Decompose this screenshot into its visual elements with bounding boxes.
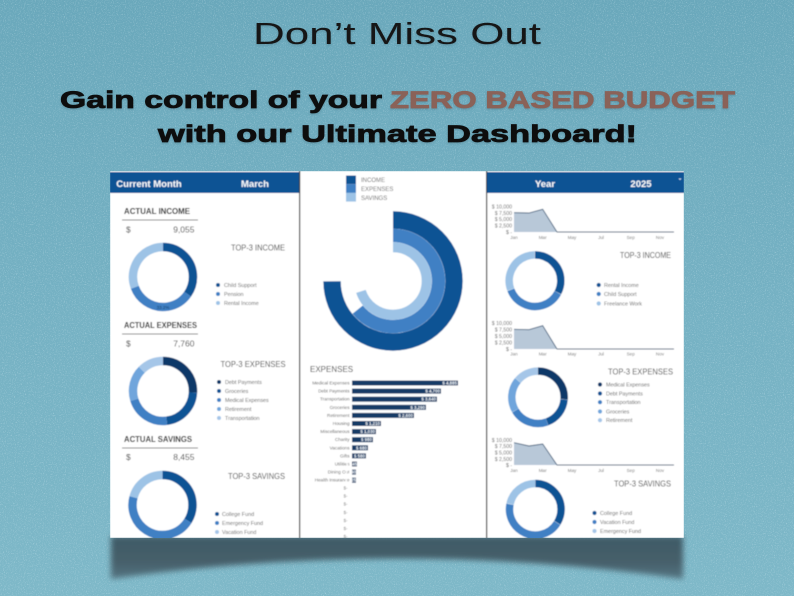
legend: year top-3 expenses: Retirement (606, 418, 633, 424)
bar chart: expenses: $- (343, 502, 348, 507)
legend: income expenses savings: INCOME (361, 178, 385, 184)
area chart: savings: Mar (539, 468, 547, 473)
headline (60, 87, 735, 148)
area chart: savings: $ 10,000 (492, 438, 512, 444)
legend: year top-3 savings: College Fund (600, 511, 632, 517)
legend: top-3 savings (215, 512, 263, 536)
area chart: savings: Sep (627, 468, 635, 473)
actual income: $ (126, 224, 131, 234)
legend: year top-3 savings: Emergency Fund (600, 529, 641, 535)
legend: top-3 expenses: Debt Payments (225, 380, 262, 386)
actual income: ACTUAL INCOME (124, 206, 190, 216)
legend: year top-3 savings (592, 511, 641, 535)
panel: center (310, 176, 458, 539)
legend: year top-3 income: Child Support (604, 292, 637, 298)
donut: income (128, 242, 198, 312)
donut: year income (504, 250, 566, 311)
bar chart: expenses: Retirement (327, 413, 350, 418)
legend: top-3 expenses: Transportation (225, 416, 260, 422)
area chart: expenses: $ 10,000 (492, 321, 512, 327)
bar chart: expenses: $ 3,290 (410, 405, 426, 410)
bar chart: expenses: $ 4,885 (442, 380, 458, 386)
legend: year top-3 expenses: Debt Payments (606, 392, 643, 398)
legend: top-3 income (216, 283, 259, 307)
header: current month: Current Month (116, 179, 182, 190)
panel: current month (110, 172, 299, 546)
actual income: 9,055 (173, 224, 195, 234)
bar chart: expenses: Debt Payments (318, 389, 350, 394)
actual expenses: 7,760 (173, 338, 195, 348)
bar chart: expenses: Miscellaneous (320, 429, 350, 434)
actual expenses: $ (126, 338, 131, 348)
bar chart: expenses (312, 380, 458, 539)
actual savings: 8,455 (173, 452, 195, 462)
bar chart: expenses: Dining Out (328, 470, 350, 475)
radial bar chart (332, 220, 454, 342)
dashboard shadow (111, 536, 683, 579)
area chart: income: $ 2,500 (495, 224, 512, 230)
area chart: income: $ - (506, 230, 512, 236)
area chart: savings (492, 438, 674, 473)
bar chart: expenses: Health Insurance (315, 478, 350, 483)
donut: year savings (505, 479, 566, 538)
headline: ZERO BASED BUDGET (390, 87, 735, 114)
legend: year top-3 expenses: Transportation (606, 400, 641, 406)
bar chart: expenses: $- (343, 518, 348, 523)
legend: year top-3 income: Freelance Work (604, 302, 642, 308)
area chart: savings: Jan (510, 468, 518, 473)
area chart: expenses: Jul (598, 352, 604, 356)
area chart: savings: $ 5,000 (495, 450, 512, 456)
area chart: income: $ 7,500 (495, 211, 512, 217)
legend: top-3 expenses: Medical Expenses (225, 398, 269, 404)
legend: top-3 income: Rental Income (224, 301, 259, 307)
bar chart: expenses: $ 2,600 (398, 413, 414, 418)
legend: top-3 income: Child Support (224, 283, 257, 289)
legend: top-3 expenses: Retirement (225, 407, 252, 413)
bar chart: expenses: $ 125 (345, 478, 357, 483)
area chart: expenses: $ - (506, 347, 512, 353)
area chart: expenses: Sep (627, 352, 635, 356)
legend: year top-3 income (597, 283, 642, 308)
bar chart: expenses: $ 145 (346, 462, 358, 466)
area chart: expenses: Mar (539, 352, 547, 356)
donut: expenses (128, 356, 198, 426)
area chart: expenses: $ 2,500 (495, 340, 512, 346)
donut: year expenses (508, 366, 569, 428)
heading: year top-3 expenses: TOP-3 EXPENSES (608, 367, 673, 377)
legend: top-3 savings: Emergency Fund (222, 521, 263, 527)
area chart: expenses: Nov (656, 352, 665, 356)
headline: Gain control of your (60, 87, 383, 114)
donut: savings (128, 470, 198, 538)
legend: year top-3 expenses (598, 382, 650, 424)
heading: top-3 income: TOP-3 INCOME (231, 242, 285, 252)
bar chart: expenses: $ 980 (361, 437, 373, 442)
bar chart: expenses: Charity (335, 437, 350, 442)
bar chart: expenses: Utilities (335, 462, 350, 466)
actual expenses: ACTUAL EXPENSES (124, 320, 197, 330)
heading: year top-3 savings: TOP-3 SAVINGS (614, 479, 671, 489)
area chart: income: Nov (656, 235, 665, 240)
title: Don’t Miss Out (253, 16, 542, 51)
area chart: savings: $ 7,500 (495, 444, 512, 450)
actual savings: ACTUAL SAVINGS (124, 434, 192, 444)
dashboard (110, 171, 684, 546)
area chart: income: Mar (539, 235, 547, 240)
area chart: savings: Nov (656, 468, 665, 473)
area chart: expenses: May (568, 352, 577, 356)
area chart: income: Jan (510, 235, 518, 240)
area chart: expenses: Jan (510, 352, 518, 356)
bar chart: expenses: $ 140 (345, 470, 357, 475)
actual income (122, 206, 198, 234)
bar chart: expenses: $- (343, 526, 348, 531)
bar chart: expenses: Medical Expenses (312, 380, 350, 386)
area chart: income: Sep (627, 235, 635, 240)
area chart: income: $ 5,000 (495, 217, 512, 223)
area chart: expenses: $ 5,000 (495, 334, 512, 340)
area chart: expenses: $ 7,500 (495, 328, 512, 334)
legend: top-3 savings: College Fund (222, 512, 254, 518)
bar chart: expenses: $ 3,640 (421, 397, 437, 402)
heading: expenses: EXPENSES (310, 365, 353, 374)
area chart: income (492, 204, 674, 240)
area chart: income: Jul (598, 235, 604, 240)
area chart: savings: Jul (598, 468, 604, 473)
bar chart: expenses: $- (343, 486, 348, 490)
legend: income expenses savings (346, 176, 393, 202)
legend: top-3 expenses (217, 380, 269, 422)
header: current month (110, 172, 299, 193)
actual savings: $ (126, 452, 131, 462)
bar chart: expenses: $- (343, 510, 348, 515)
heading: top-3 expenses: TOP-3 EXPENSES (220, 359, 286, 369)
heading: top-3 savings: TOP-3 SAVINGS (228, 471, 285, 481)
legend: top-3 expenses: Groceries (225, 389, 249, 395)
bar chart: expenses: $ 4,700 (425, 389, 441, 394)
bar chart: expenses: $ 680 (356, 445, 368, 450)
donut: income: 33.2% (157, 305, 169, 310)
headline: with our Ultimate Dashboard! (157, 121, 637, 148)
area chart: income: $ 10,000 (492, 204, 512, 210)
actual savings (122, 434, 198, 462)
actual expenses (122, 320, 198, 348)
area chart: savings: May (568, 468, 577, 473)
bar chart: expenses: $ 1,030 (360, 429, 376, 434)
legend: year top-3 expenses: Medical Expenses (606, 382, 650, 388)
header: year: Year (535, 179, 555, 190)
heading: year top-3 income: TOP-3 INCOME (620, 250, 671, 260)
bar chart: expenses: Gifts (340, 453, 350, 458)
header: year: 2025 (630, 179, 652, 190)
legend: income expenses savings: SAVINGS (361, 196, 387, 202)
area chart: savings: $ - (506, 463, 512, 469)
area chart: income: May (568, 235, 577, 240)
bar chart: expenses: Groceries (330, 405, 350, 410)
legend: top-3 savings: Vacation Fund (222, 530, 256, 536)
legend: year top-3 savings: Vacation Fund (600, 520, 634, 526)
bar chart: expenses: Transportation (320, 397, 350, 402)
bar chart: expenses: $ 1,210 (365, 421, 381, 426)
panel: year (487, 172, 684, 545)
legend: income expenses savings: EXPENSES (361, 187, 393, 193)
bar chart: expenses: Vacations (330, 445, 350, 450)
bar chart: expenses: Housing (333, 421, 350, 426)
area chart: savings: $ 2,500 (495, 457, 512, 463)
bar chart: expenses: $ 580 (354, 453, 366, 458)
header: year (487, 172, 684, 193)
legend: top-3 income: Pension (224, 292, 243, 298)
legend: year top-3 expenses: Groceries (606, 410, 630, 416)
bar chart: expenses: $- (343, 494, 348, 499)
header: current month: March (241, 179, 269, 190)
area chart: expenses (492, 321, 674, 356)
bar chart: expenses: $- (343, 534, 348, 539)
legend: year top-3 income: Rental Income (604, 283, 639, 289)
